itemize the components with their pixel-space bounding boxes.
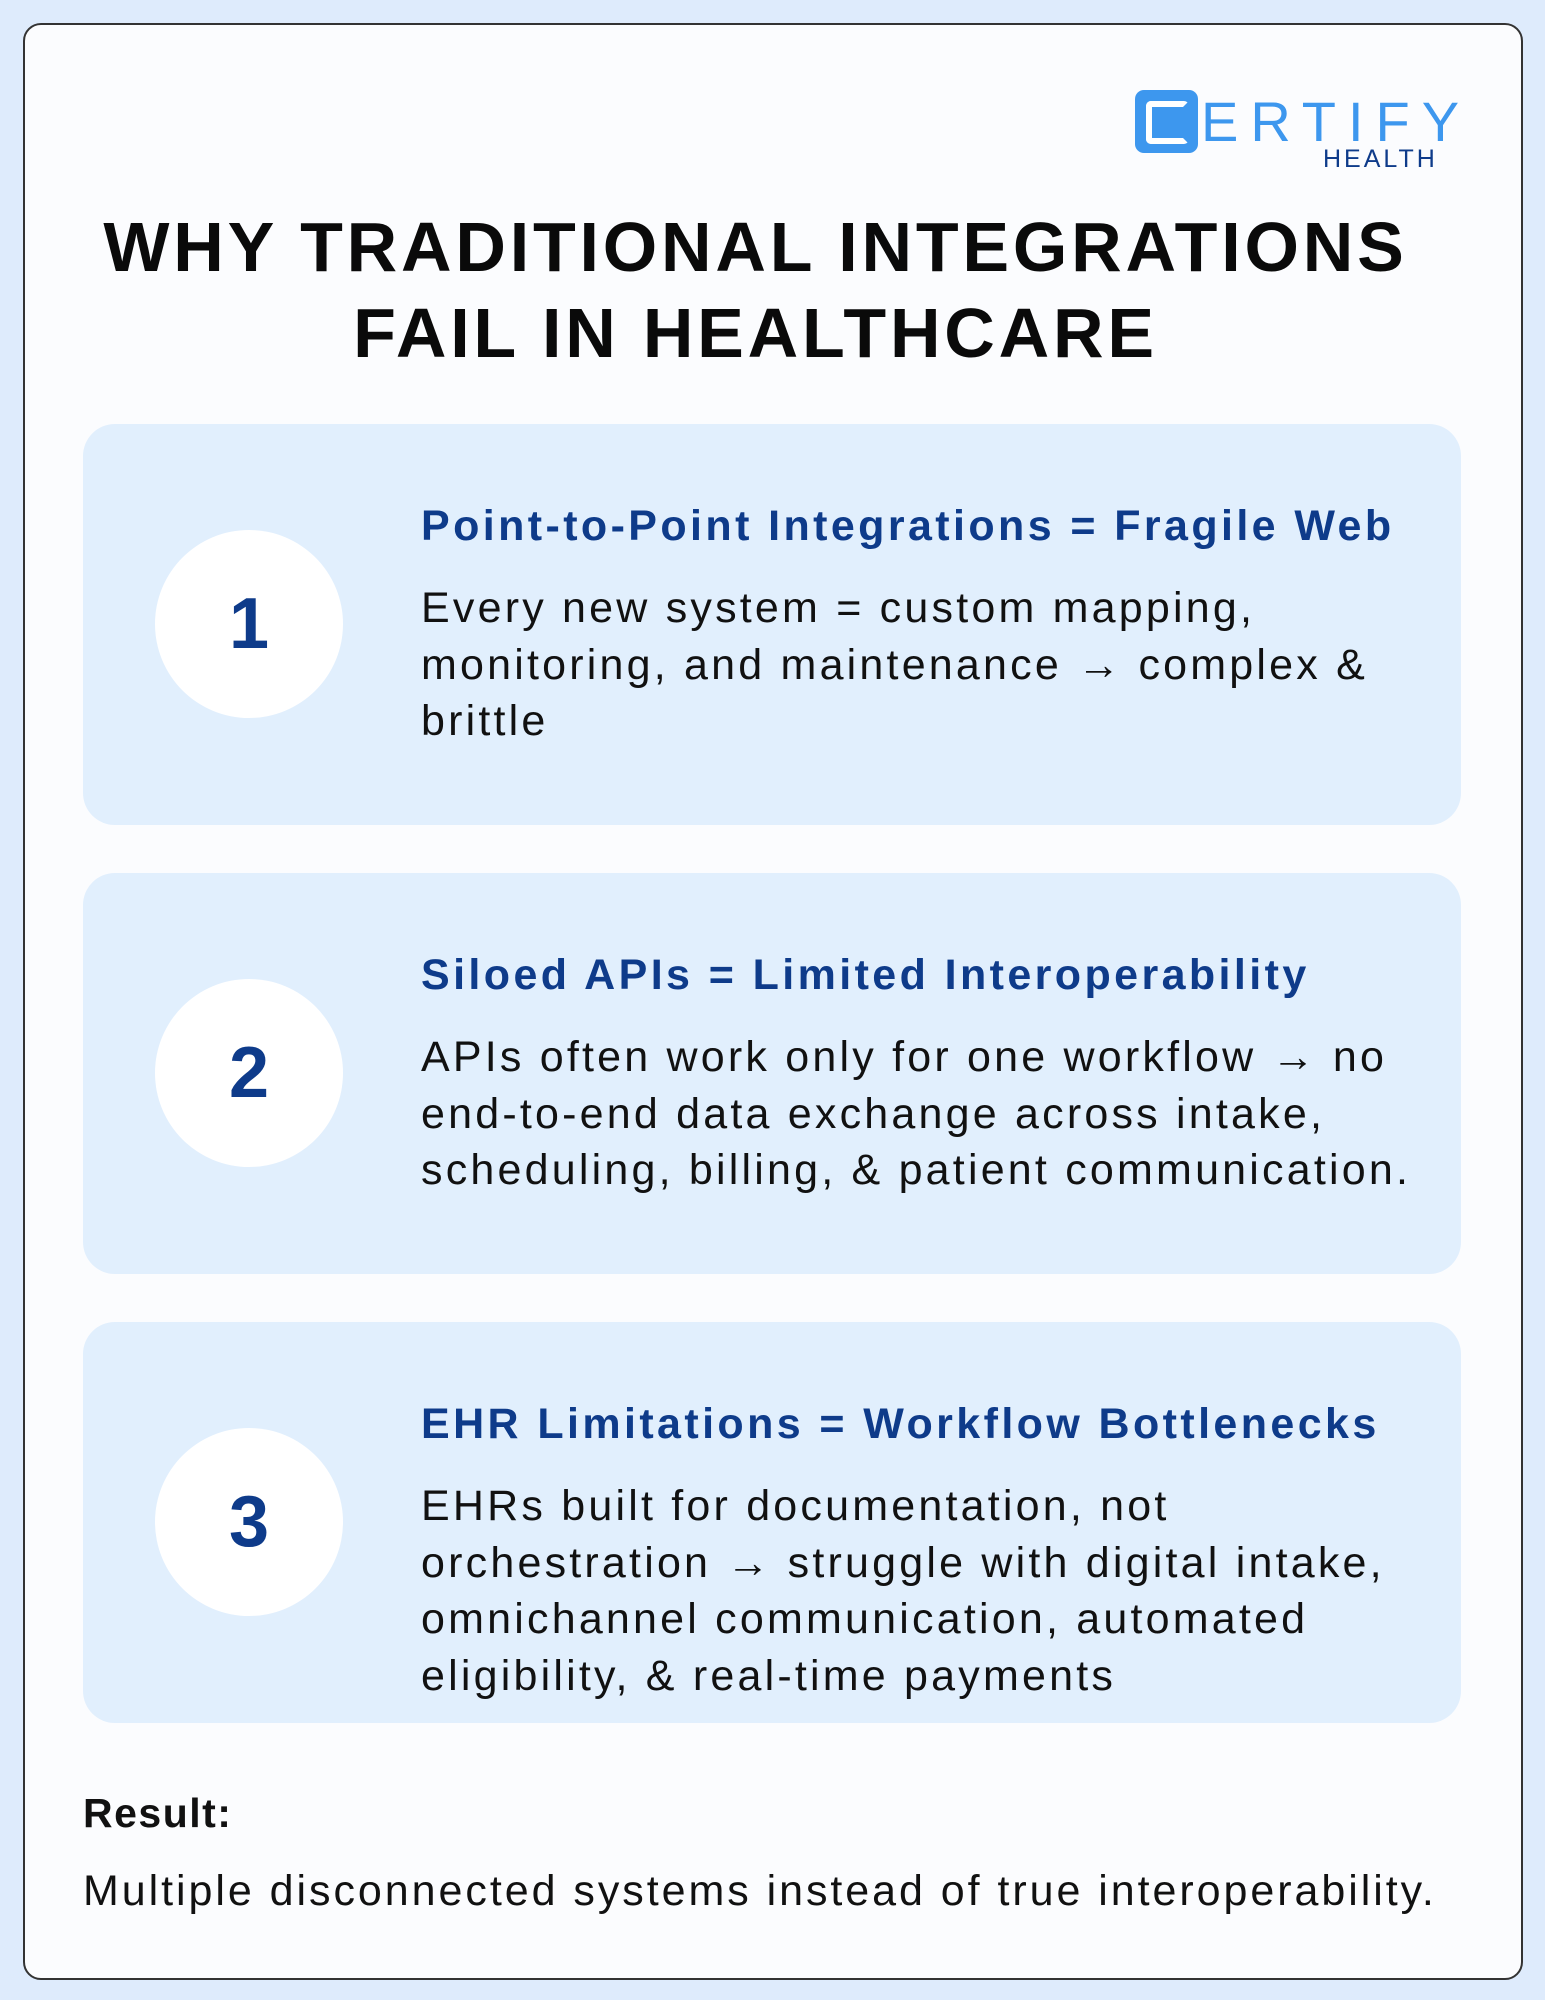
- body 1: [421, 584, 1368, 745]
- body 3: eligibility, & real-time payments: [421, 1652, 1116, 1700]
- number 1: [155, 530, 343, 718]
- body 3: orchestration → struggle with digital intake,: [421, 1538, 1385, 1586]
- body 2: scheduling, billing, & patient communication.: [421, 1146, 1411, 1194]
- logo: HEALTH: [1323, 145, 1438, 173]
- number 3: 3: [229, 1482, 269, 1562]
- title: [103, 208, 1408, 372]
- result: Multiple disconnected systems instead of true interoperability.: [83, 1867, 1437, 1915]
- body 3: omnichannel communication, automated: [421, 1595, 1308, 1643]
- title: WHY TRADITIONAL INTEGRATIONS: [103, 208, 1408, 286]
- panel: 2: [83, 873, 1461, 1274]
- panel: 1: [83, 424, 1461, 825]
- heading 3: EHR Limitations = Workflow Bottlenecks: [421, 1400, 1380, 1448]
- panel: 3: [83, 1322, 1461, 1723]
- result: Result:: [83, 1790, 232, 1836]
- body 2: end-to-end data exchange across intake,: [421, 1090, 1325, 1138]
- title: FAIL IN HEALTHCARE: [353, 294, 1158, 372]
- body 1: Every new system = custom mapping,: [421, 584, 1255, 632]
- body 3: EHRs built for documentation, not: [421, 1482, 1170, 1530]
- icon: C square: [1135, 90, 1198, 153]
- heading 2: Siloed APIs = Limited Interoperability: [421, 951, 1310, 999]
- body 2: APIs often work only for one workflow → no: [421, 1033, 1387, 1081]
- number 2: 2: [229, 1033, 269, 1113]
- body 1: brittle: [421, 697, 549, 745]
- body 2: [421, 1033, 1411, 1194]
- number 3: [155, 1428, 343, 1616]
- logo: [1135, 90, 1471, 173]
- result: [83, 1790, 1437, 1915]
- heading 1: Point-to-Point Integrations = Fragile Web: [421, 502, 1395, 550]
- body 3: [421, 1482, 1385, 1700]
- number 2: [155, 979, 343, 1167]
- number 1: 1: [229, 584, 269, 664]
- body 1: monitoring, and maintenance → complex &: [421, 640, 1368, 688]
- logo text: ERTIFY: [1201, 90, 1471, 153]
